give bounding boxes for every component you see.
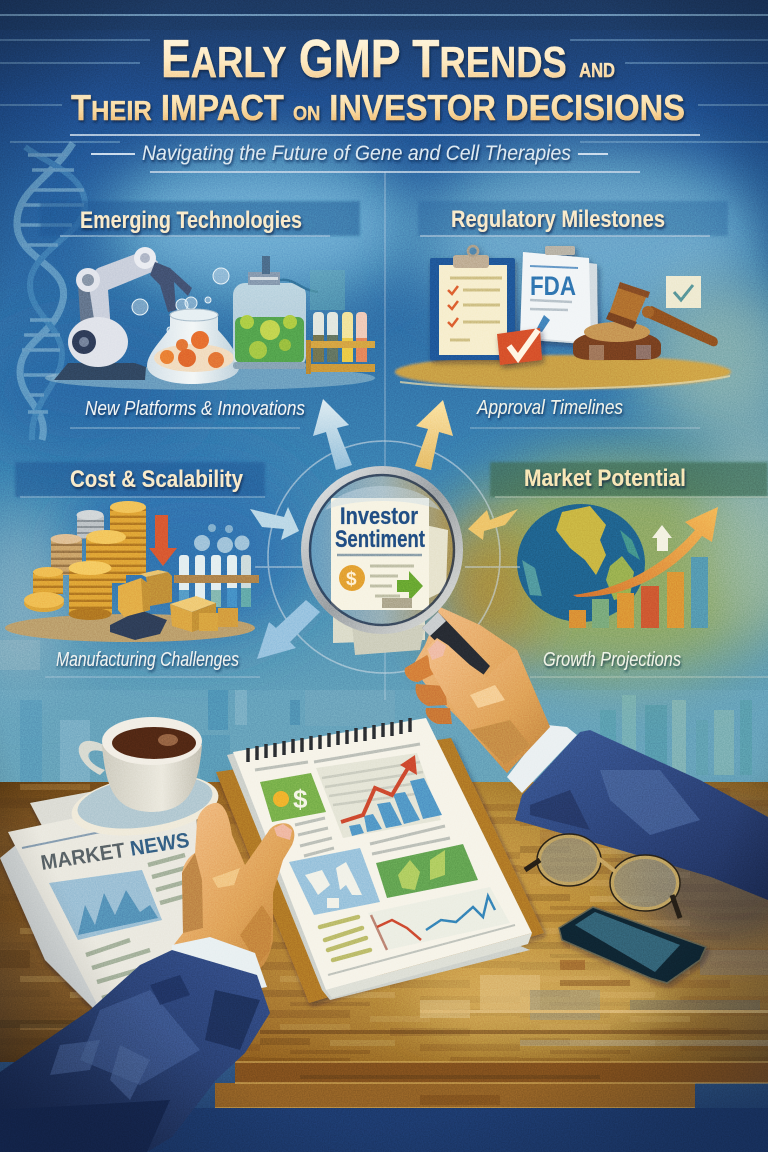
icon: flask <box>147 309 239 384</box>
icon: clipboard <box>430 246 515 360</box>
table lines <box>316 753 441 838</box>
figure image <box>289 848 380 915</box>
glasses <box>525 834 680 918</box>
report card: Investor <box>340 503 418 530</box>
heading band <box>490 462 768 497</box>
heading band: Regulatory Milestones <box>451 206 665 233</box>
hand: left holding notebook <box>172 803 294 968</box>
arrow: to emerging technologies <box>313 399 352 470</box>
handle <box>422 612 490 682</box>
subtitle: Navigating the Future of Gene and Cell Therapies <box>142 142 571 165</box>
arrow: to manufacturing challenges <box>257 600 320 659</box>
heading band <box>15 462 265 497</box>
arrow: from market potential <box>468 509 518 540</box>
line chart <box>368 887 510 950</box>
icon: cargo boxes <box>110 570 238 640</box>
glass highlight <box>325 486 440 510</box>
magnifier <box>305 470 490 682</box>
table surface <box>395 355 731 389</box>
circular guide ring <box>255 441 520 673</box>
icon: red down arrow <box>149 515 177 566</box>
title: THEIR IMPACT ON INVESTOR DECISIONS <box>71 87 685 128</box>
label: New Platforms & Innovations <box>85 398 305 420</box>
newspaper <box>0 790 205 1015</box>
icon: gavel <box>573 282 718 360</box>
olive lines <box>320 917 370 960</box>
icon: FDA document <box>520 246 598 345</box>
under sheets <box>333 610 425 655</box>
icon: dollar tile: $ <box>293 784 308 814</box>
desk <box>0 782 768 1152</box>
left cuff and sleeve <box>0 937 270 1152</box>
heading band: Cost & Scalability <box>70 466 244 493</box>
coffee cup <box>68 717 222 844</box>
icon: red check <box>497 328 542 365</box>
heading band <box>418 201 728 236</box>
heading band: Emerging Technologies <box>80 207 302 234</box>
panel: cost and scalability <box>5 462 265 677</box>
report card: Sentiment <box>335 526 425 553</box>
label: Approval Timelines <box>476 397 623 419</box>
panel: regulatory milestones <box>395 201 731 428</box>
phone <box>559 907 706 983</box>
spiral binding <box>248 718 410 762</box>
label: Growth Projections <box>543 649 681 671</box>
bar chart <box>569 557 708 628</box>
pixel skyline texture <box>0 640 768 785</box>
platform <box>5 614 255 642</box>
icon: bubbles <box>132 268 229 333</box>
pages <box>227 752 530 1000</box>
metal ring <box>305 470 459 630</box>
icon: bioreactor jar <box>233 256 318 369</box>
hand: right holding magnifier <box>405 607 550 773</box>
report card: $ <box>346 569 357 590</box>
icon: dollar tile <box>260 773 326 822</box>
right cuff and sleeve <box>507 725 768 900</box>
arrow: from cost and scalability <box>250 507 299 540</box>
bar chart <box>349 778 442 836</box>
label: Manufacturing Challenges <box>56 649 239 671</box>
icon: check note <box>666 276 701 308</box>
decorative rules <box>0 15 768 700</box>
icon: robot arm <box>54 247 192 380</box>
title: EARLY GMP TRENDS AND <box>161 29 615 89</box>
lens <box>308 473 456 627</box>
report card <box>331 498 448 610</box>
green image <box>376 844 478 898</box>
headline: MARKET NEWS <box>39 829 191 875</box>
title <box>71 29 685 128</box>
panel: emerging technologies <box>40 201 375 428</box>
notebook <box>216 718 544 1003</box>
heading band <box>40 201 360 236</box>
icon: white up arrow <box>652 525 672 551</box>
icon: coin stacks <box>24 501 146 620</box>
heading band: Market Potential <box>524 465 686 492</box>
panel: market potential <box>490 462 768 677</box>
icon: test tube rack <box>306 270 375 374</box>
hand: thumb and palm over handle <box>427 638 550 773</box>
icon: globe <box>517 504 645 622</box>
arrow: to regulatory milestones <box>415 400 453 470</box>
icon: red trend arrow <box>341 768 408 822</box>
icon: FDA document: FDA <box>530 271 576 301</box>
icon: vials <box>174 524 259 607</box>
shelf <box>45 366 375 390</box>
dna helix <box>17 143 85 440</box>
icon: growth arrow <box>573 507 718 597</box>
